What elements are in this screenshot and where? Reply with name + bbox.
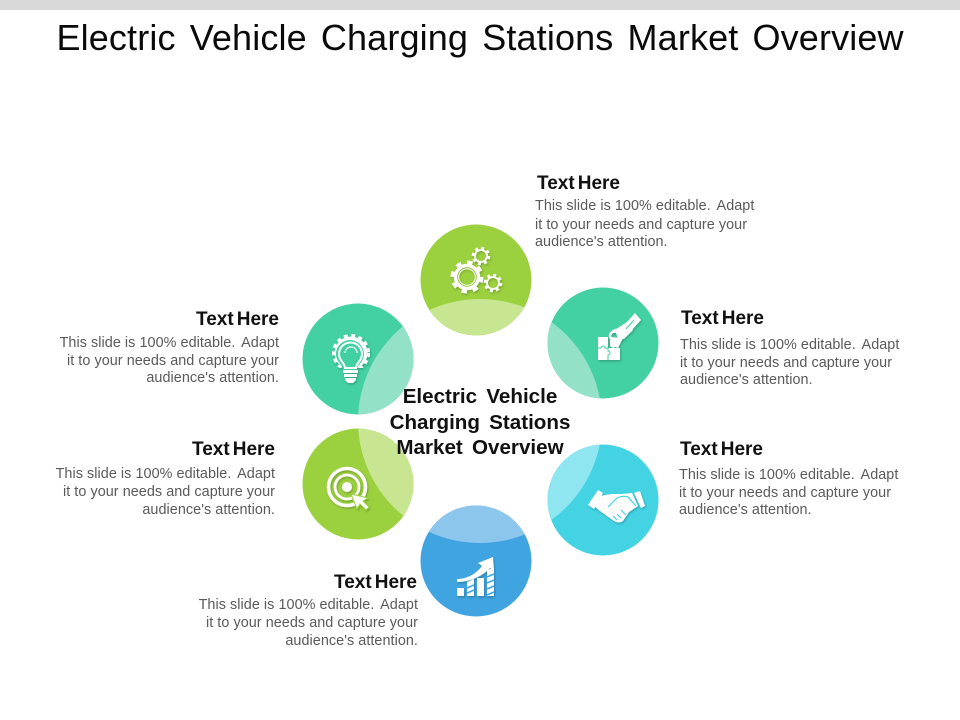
center label: Electric Vehicle (403, 385, 557, 408)
title: Electric Vehicle Charging Stations Market Overview (56, 17, 904, 58)
circle: handshake (548, 444, 658, 556)
text block: bottom: Text Here (334, 572, 417, 593)
center label: Market Overview (396, 436, 565, 459)
text block: right lower: Text Here (680, 439, 763, 460)
icon: bulb and gear (334, 336, 368, 383)
text block: bottom (199, 572, 418, 649)
text block: right lower: audience's attention. (679, 502, 812, 518)
circle: target (302, 428, 414, 540)
text block: left lower (56, 439, 275, 518)
text block: right lower: This slide is 100% editable. Adapt (679, 467, 898, 483)
text block: right lower: it to your needs and capture your (679, 485, 891, 501)
text block: left lower: audience's attention. (142, 502, 275, 518)
text block: top: This slide is 100% editable. Adapt (535, 198, 754, 214)
circle: puzzle (548, 288, 658, 398)
icon: handshake (588, 490, 645, 522)
text block: left upper: This slide is 100% editable. Adapt (60, 335, 279, 351)
icon: hand placing puzzle piece (598, 313, 641, 360)
text block: right upper: This slide is 100% editable. Adapt (680, 337, 899, 353)
text block: right upper (680, 308, 899, 388)
top bar (0, 0, 960, 10)
center label: Charging Stations (390, 411, 570, 434)
icon: rising bar chart (457, 557, 494, 596)
text block: left upper: audience's attention. (146, 370, 279, 386)
text block: left upper: Text Here (196, 309, 279, 330)
text block: right upper: audience's attention. (680, 372, 813, 388)
circle: lightbulb (302, 304, 414, 414)
text block: right upper: Text Here (681, 308, 764, 329)
text block: left lower: it to your needs and capture your (63, 484, 275, 500)
icon: target with cursor (328, 468, 369, 510)
center label (390, 385, 570, 459)
text block: left lower: Text Here (192, 439, 275, 460)
text block: top: Text Here (537, 173, 620, 194)
text block: top: audience's attention. (535, 234, 668, 250)
text block: left lower: This slide is 100% editable. Adapt (56, 466, 275, 482)
circle: gears (420, 224, 532, 336)
text block: top: it to your needs and capture your (535, 217, 747, 233)
text block: bottom: This slide is 100% editable. Adapt (199, 597, 418, 613)
text block: top (535, 173, 754, 250)
text block: bottom: audience's attention. (285, 633, 418, 649)
circle: growth chart (420, 506, 532, 616)
text block: right lower (679, 439, 898, 518)
text block: left upper (60, 309, 279, 386)
text block: left upper: it to your needs and capture your (67, 353, 279, 369)
text block: bottom: it to your needs and capture your (206, 615, 418, 631)
text block: right upper: it to your needs and capture your (680, 355, 892, 371)
icon: gears (452, 248, 501, 292)
